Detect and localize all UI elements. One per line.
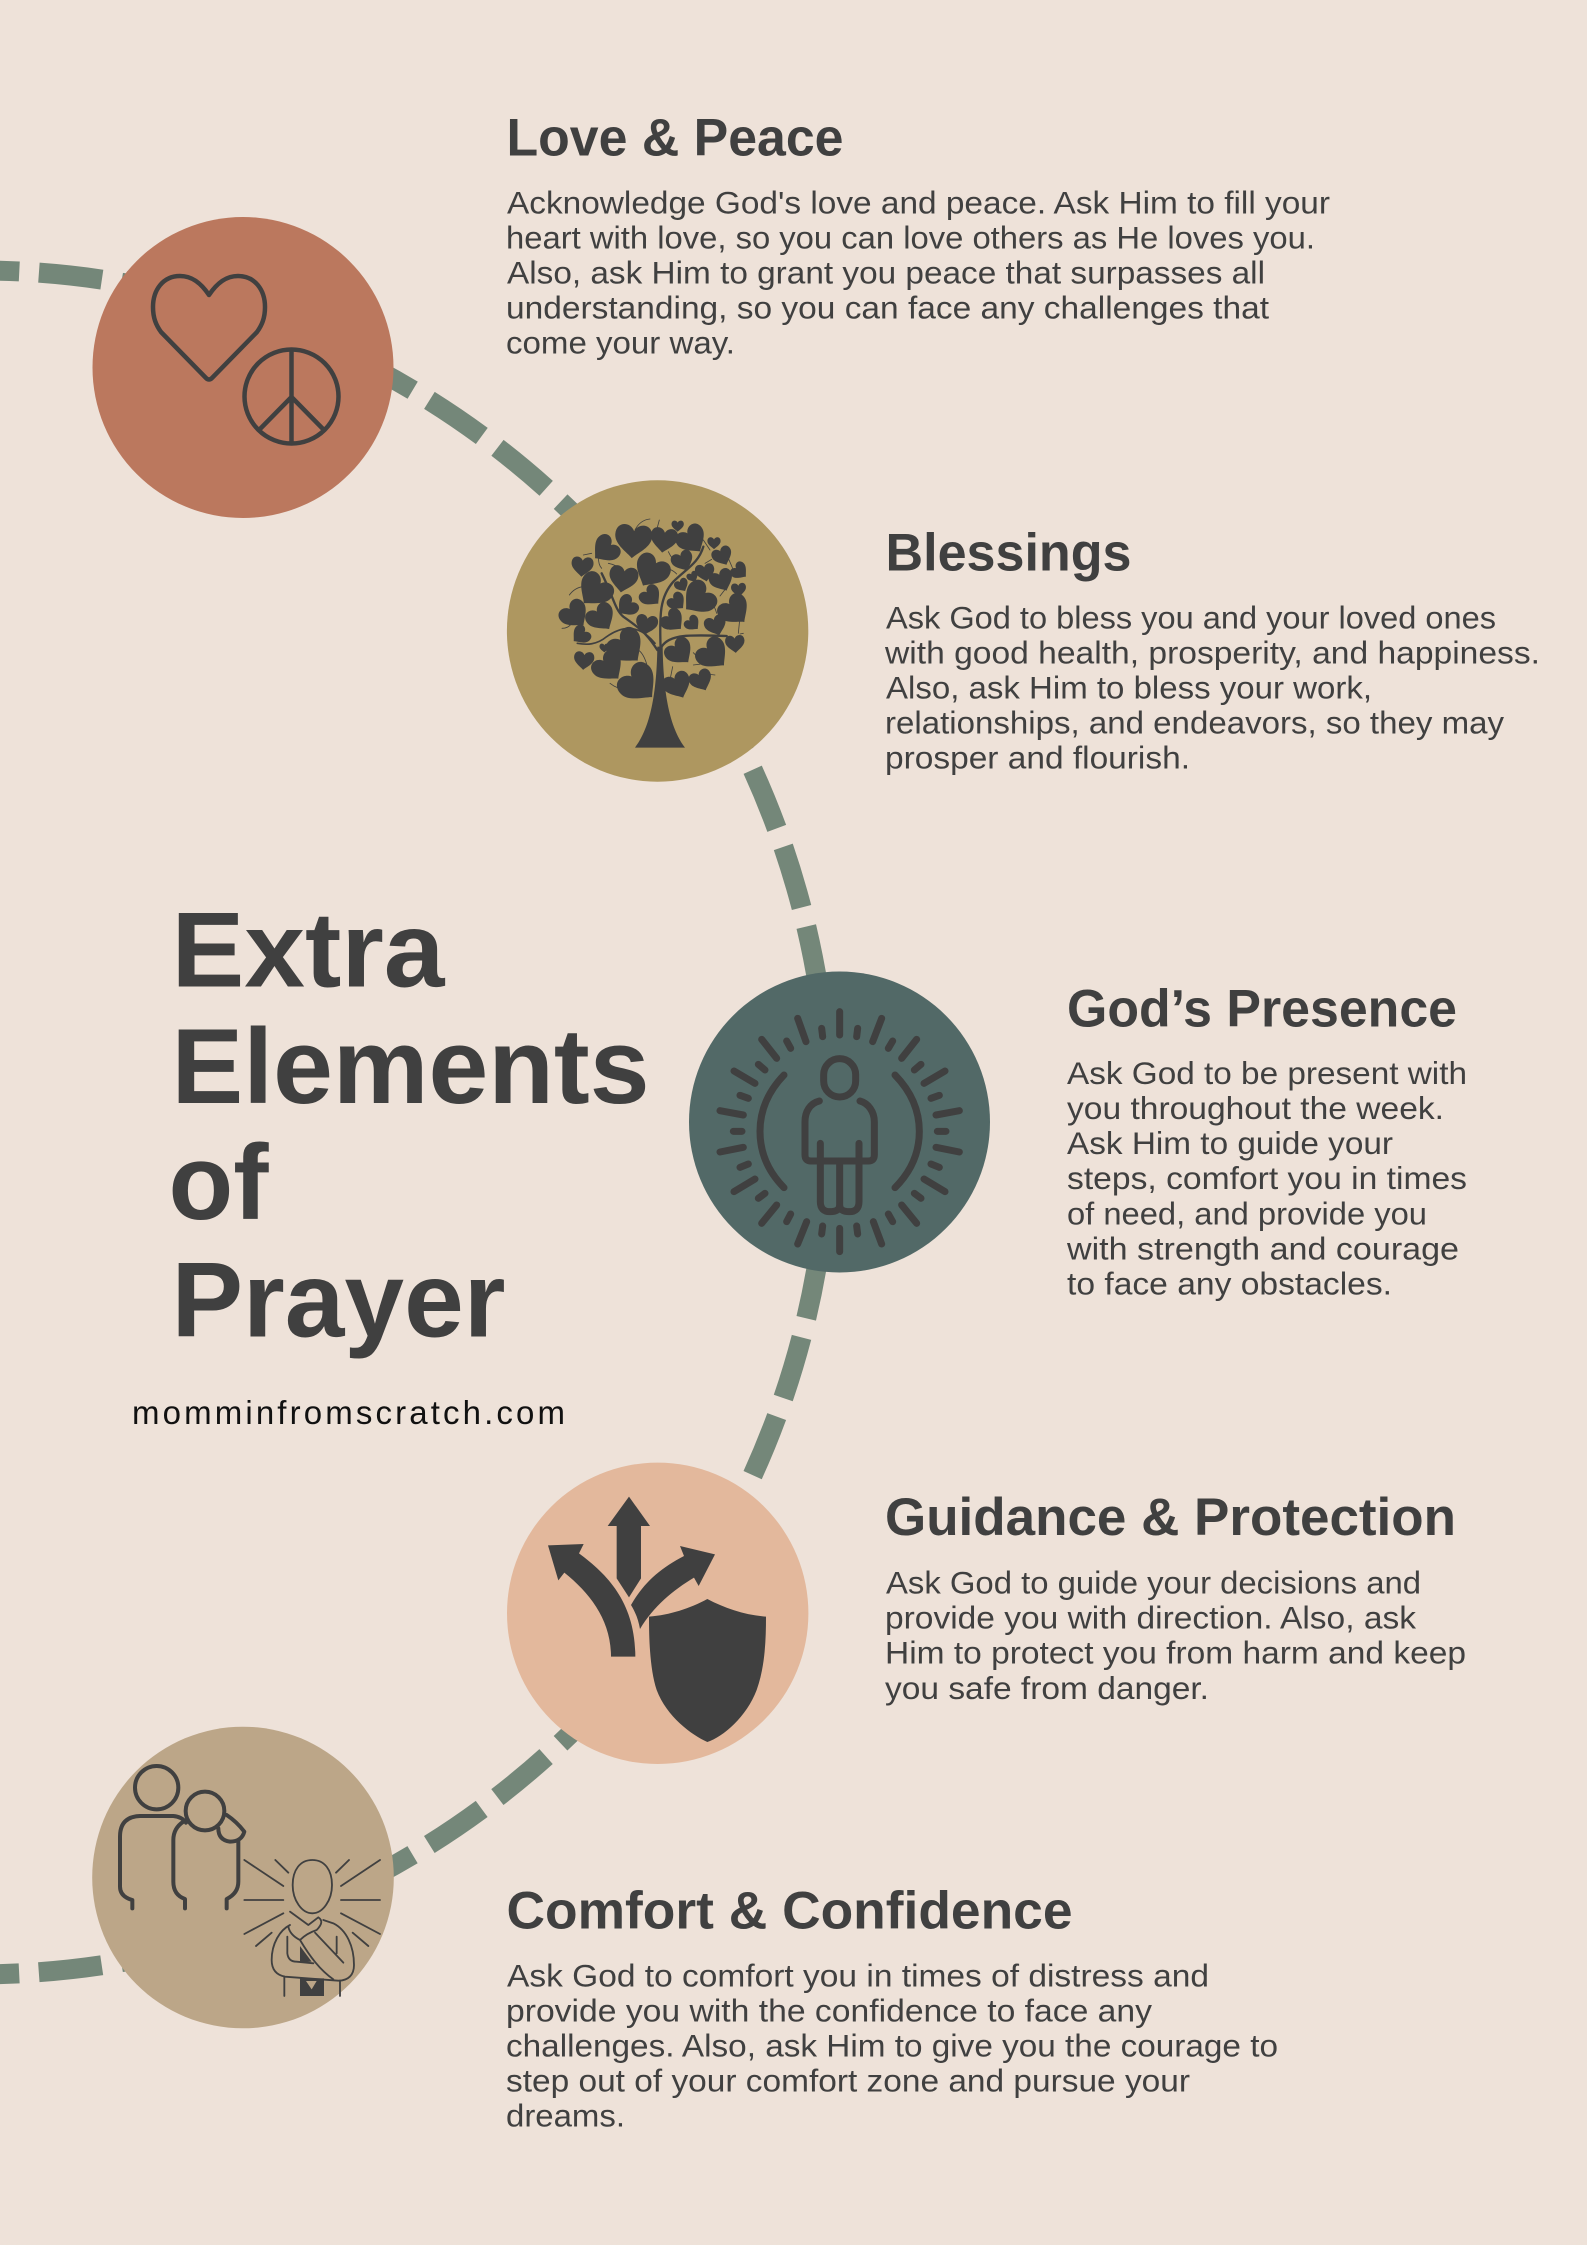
text block: blessings [884,524,1540,775]
icon: heart tree [556,519,756,748]
circle group: god's presence [689,972,990,1272]
text block: blessings: prosper and flourish. [885,739,1190,775]
text block: blessings: relationships, and endeavors, so they may [885,704,1504,740]
main title [168,889,650,1359]
text block: comfort and confidence: challenges. Also, ask Him to give you the courage to [506,2028,1278,2064]
dashed arc path [0,270,829,1974]
text block: god's presence: to face any obstacles. [1067,1265,1392,1301]
icon: heart [153,276,265,380]
text block: comfort and confidence: provide you with the confidence to face any [506,1993,1152,2029]
text block: love and peace [506,109,1330,360]
text block: guidance and protection [885,1488,1466,1706]
text block: comfort and confidence: dreams. [506,2098,625,2134]
main title: of [168,1122,269,1242]
text block: comfort and confidence: step out of your comfort zone and pursue your [506,2063,1190,2099]
icon: comforting figures [120,1766,244,1908]
circle group: comfort and confidence [92,1727,394,2028]
text block: guidance and protection: Ask God to guide your decisions and [886,1564,1421,1600]
icon: person with radiating light [720,1012,959,1252]
text block: guidance and protection: Him to protect you from harm and keep [885,1634,1466,1670]
text block: guidance and protection: Guidance & Protection [885,1488,1456,1547]
icon: three-way arrows and shield [548,1497,766,1742]
text block: god's presence: God’s Presence [1067,980,1457,1039]
text block: blessings: with good health, prosperity, and happiness. [884,634,1540,670]
text block: blessings: Also, ask Him to bless your work, [886,670,1372,706]
text block: love and peace: Also, ask Him to grant you peace that surpasses all [507,254,1265,290]
text block: love and peace: Love & Peace [506,109,844,168]
text block: comfort and confidence [506,1881,1278,2134]
main title: Extra [172,889,446,1009]
text block: comfort and confidence: Comfort & Confidence [506,1881,1072,1940]
circle group: guidance and protection [507,1463,808,1764]
icon: thoughtful person [244,1860,380,1996]
text block: blessings: Blessings [886,524,1132,583]
text block: god's presence: with strength and courage [1066,1230,1459,1266]
main title: Prayer [172,1239,506,1359]
website url: momminfromscratch.com [132,1394,565,1431]
icon: peace sign [244,350,338,444]
text block: love and peace: Acknowledge God's love and peace. Ask Him to fill your [507,184,1330,220]
text block: god's presence [1066,980,1467,1301]
text block: god's presence: steps, comfort you in times [1067,1160,1467,1196]
text block: god's presence: Ask God to be present with [1067,1055,1467,1091]
text block: god's presence: you throughout the week. [1067,1090,1444,1126]
text block: blessings: Ask God to bless you and your loved ones [886,599,1496,635]
text block: love and peace: come your way. [506,324,735,360]
text block: love and peace: understanding, so you can face any challenges that [506,289,1269,325]
text block: guidance and protection: provide you with direction. Also, ask [885,1599,1416,1635]
text block: god's presence: Ask Him to guide your [1067,1125,1393,1161]
circle group: blessings [507,480,808,782]
text block: guidance and protection: you safe from danger. [885,1670,1209,1706]
text block: comfort and confidence: Ask God to comfort you in times of distress and [507,1958,1209,1994]
circle group: love and peace [92,217,394,518]
text block: god's presence: of need, and provide you [1067,1195,1427,1231]
main title: Elements [172,1006,650,1126]
text block: love and peace: heart with love, so you can love others as He loves you. [506,219,1315,255]
